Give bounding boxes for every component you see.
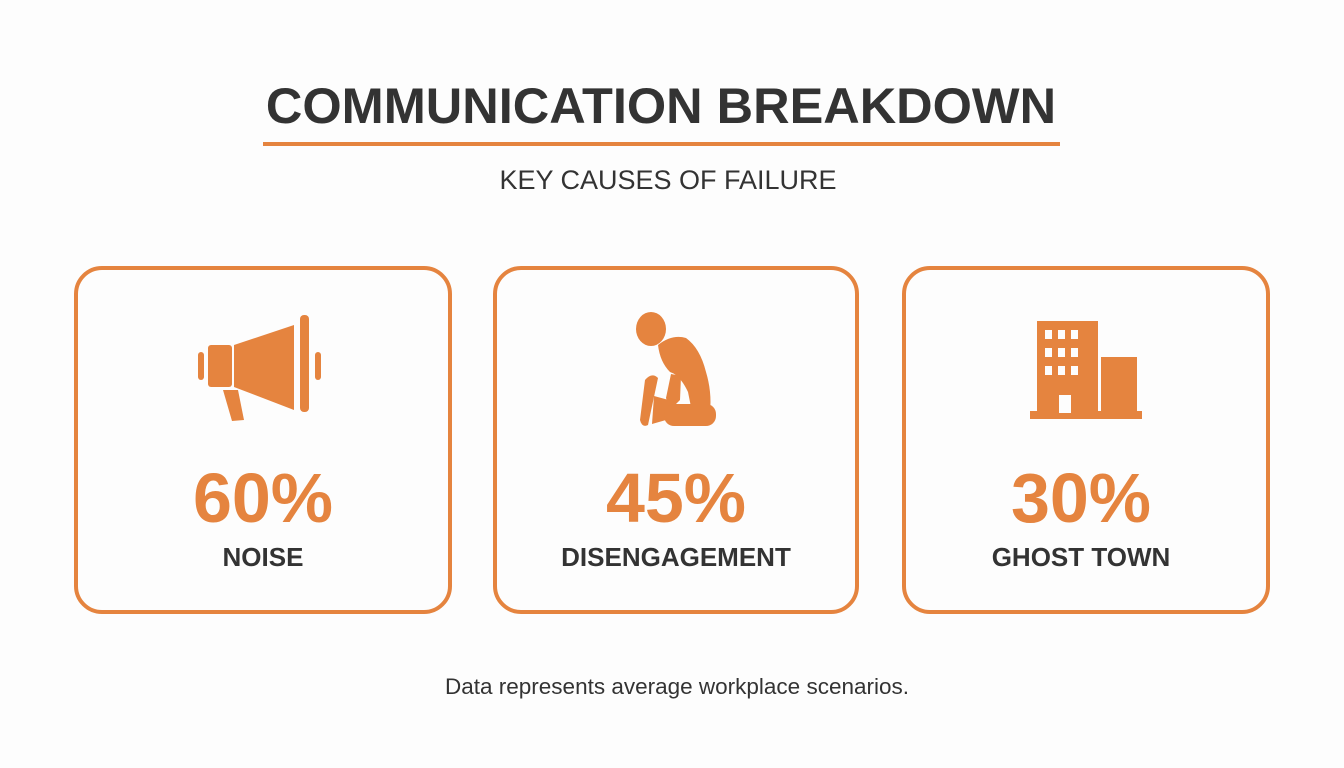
footer note: Data represents average workplace scenarios. — [445, 674, 909, 699]
label: NOISE — [223, 542, 303, 572]
label: GHOST TOWN — [992, 542, 1170, 572]
stat: 30% ghost town — [992, 459, 1170, 572]
stat: 45% disengagement — [561, 459, 791, 572]
panel: ghost town — [902, 266, 1270, 614]
panel: noise — [74, 266, 452, 614]
icon: megaphone — [198, 315, 321, 421]
panel: disengagement — [493, 266, 859, 614]
icon: disengaged person — [636, 312, 716, 426]
stat: 60% noise — [193, 459, 333, 572]
title underline — [263, 142, 1060, 146]
percentage: 45% — [606, 459, 746, 537]
label: DISENGAGEMENT — [561, 542, 791, 572]
title: COMMUNICATION BREAKDOWN — [266, 77, 1056, 134]
percentage: 30% — [1011, 459, 1151, 537]
icon: building — [1030, 321, 1142, 419]
percentage: 60% — [193, 459, 333, 537]
subtitle: KEY CAUSES OF FAILURE — [499, 165, 837, 195]
